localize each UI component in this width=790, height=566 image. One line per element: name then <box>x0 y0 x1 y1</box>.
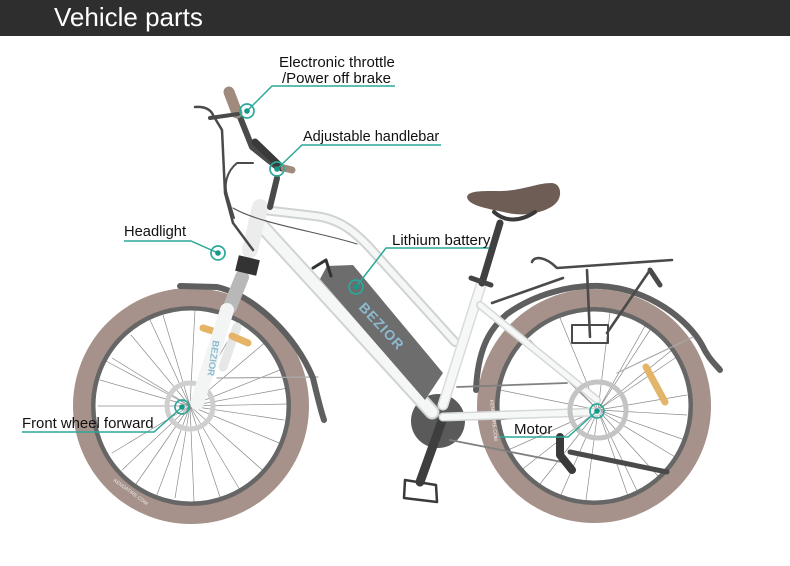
header bar <box>0 0 790 36</box>
rear wheel <box>486 298 702 514</box>
callout: lithium battery: Lithium battery <box>392 232 491 249</box>
callout: front wheel forward <box>22 400 189 432</box>
front fender <box>180 286 324 420</box>
callout: motor: Motor <box>514 421 552 438</box>
callout: headlight: Headlight <box>124 224 186 240</box>
callout: front wheel forward: Front wheel forward <box>22 416 154 432</box>
rear derailleur and chain stay <box>560 382 667 472</box>
fork: BEZIOR <box>204 340 221 377</box>
tire lettering: KENDATIRE.COM <box>112 478 149 507</box>
callout: adjustable handlebar <box>270 129 441 176</box>
rear tire lettering: KENDATIRE.COM <box>488 400 498 441</box>
seat and post <box>467 183 560 285</box>
rear fender <box>476 286 720 390</box>
handlebar and stem <box>195 92 292 250</box>
front brake disc <box>167 383 213 429</box>
fender stay <box>217 377 318 378</box>
title: Vehicle parts <box>54 2 203 32</box>
callout: electronic throttle: Electronic throttle <box>279 54 395 71</box>
battery: BEZIOR <box>356 299 408 353</box>
callout: motor <box>500 404 604 438</box>
callout: electronic throttle: /Power off brake <box>282 70 391 87</box>
rear reflector <box>646 367 665 402</box>
callout: headlight <box>124 224 225 260</box>
frame <box>233 207 597 417</box>
bicycle illustration <box>82 92 720 515</box>
chain and crank <box>404 383 567 502</box>
rear rack <box>492 258 672 343</box>
callout: lithium battery <box>349 232 491 294</box>
battery <box>313 260 443 400</box>
callout: electronic throttle <box>240 54 395 118</box>
fork <box>197 263 258 403</box>
callout: adjustable handlebar: Adjustable handlebar <box>303 129 439 145</box>
front wheel <box>82 297 318 515</box>
rear fender stay <box>617 337 693 373</box>
